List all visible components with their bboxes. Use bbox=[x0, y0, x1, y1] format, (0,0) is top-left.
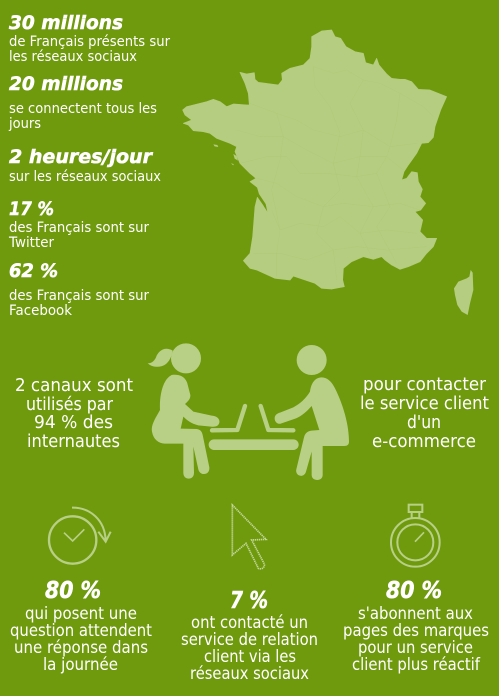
stat: 2 heures par jour: sur les réseaux sociaux bbox=[9, 169, 161, 185]
stat: 20 millions: se connectent tous les bbox=[9, 101, 157, 117]
stat: 17 % Twitter bbox=[8, 198, 149, 251]
text: 2 canaux: internautes bbox=[27, 432, 120, 452]
text: 2 canaux: utilisés par bbox=[26, 395, 114, 415]
icon: clock with arrow bbox=[49, 508, 111, 564]
stat: 20 millions bbox=[8, 73, 157, 132]
stat: 7 % relation client: ont contacté un bbox=[191, 613, 308, 632]
stat: 62 % Facebook: des Français sont sur bbox=[9, 288, 149, 304]
stat: 80 % réponse bbox=[10, 578, 152, 674]
stat: 80 % réponse: la journée bbox=[43, 655, 118, 674]
stat: 7 % relation client: service de relation bbox=[181, 630, 318, 649]
icon: two people at laptops bbox=[148, 343, 349, 480]
map of Corsica bbox=[454, 270, 473, 315]
stat: 30 millions bbox=[9, 12, 170, 65]
stat: 20 millions: 20 millions bbox=[9, 73, 123, 95]
icon: mouse cursor bbox=[232, 505, 266, 569]
text: pour contacter: le service client bbox=[360, 394, 489, 414]
laptops and table bbox=[209, 406, 299, 450]
text: pour contacter: e-commerce bbox=[372, 432, 476, 452]
stat: 62 % Facebook: 62 % bbox=[9, 260, 58, 282]
text: pour contacter: pour contacter bbox=[363, 375, 487, 395]
text: 2 canaux bbox=[15, 376, 133, 452]
panel: national statistics bbox=[8, 12, 170, 319]
stat: 2 heures par jour bbox=[9, 146, 161, 185]
stat: 7 % relation client: 7 % bbox=[230, 588, 268, 614]
stat: 17 % Twitter: des Français sont sur bbox=[9, 220, 149, 236]
text: pour contacter bbox=[360, 375, 489, 452]
stat: 80 % abonnement bbox=[343, 578, 489, 674]
stat: 20 millions: jours bbox=[8, 116, 41, 132]
stat: 2 heures par jour: 2 heures/jour bbox=[9, 146, 154, 168]
stat: 7 % relation client: réseaux sociaux bbox=[190, 664, 309, 683]
stat: 30 millions: de Français présents sur bbox=[9, 34, 170, 50]
stat: 62 % Facebook bbox=[9, 260, 149, 319]
stat: 80 % réponse: question attendent bbox=[10, 621, 152, 640]
text: pour contacter: d'un bbox=[407, 413, 441, 433]
woman bbox=[148, 343, 219, 479]
stat: 17 % Twitter: Twitter bbox=[8, 235, 54, 251]
text: 2 canaux: 94 % des bbox=[34, 413, 113, 433]
stat: 80 % abonnement: 80 % bbox=[386, 578, 442, 604]
stat: 7 % relation client bbox=[181, 588, 318, 683]
map of France bbox=[183, 30, 447, 289]
man bbox=[275, 345, 349, 480]
stat: 80 % abonnement: pour un service bbox=[358, 638, 473, 657]
stat: 62 % Facebook: Facebook bbox=[9, 303, 73, 319]
icon: stopwatch bbox=[391, 505, 440, 567]
text: 2 canaux: 2 canaux sont bbox=[15, 376, 133, 396]
stat: 7 % relation client: client via les bbox=[204, 647, 296, 666]
stat: 80 % abonnement: s'abonnent aux bbox=[358, 604, 473, 623]
stat: 80 % abonnement: client plus réactif bbox=[352, 655, 481, 674]
stat: 30 millions: 30 millions bbox=[9, 12, 123, 34]
stat: 80 % réponse: qui posent une bbox=[25, 604, 137, 623]
stat: 80 % réponse: une réponse dans bbox=[14, 638, 148, 657]
stat: 30 millions: les réseaux sociaux bbox=[9, 49, 137, 65]
stat: 80 % réponse: 80 % bbox=[45, 578, 101, 604]
stat: 17 % Twitter: 17 % bbox=[9, 198, 54, 220]
